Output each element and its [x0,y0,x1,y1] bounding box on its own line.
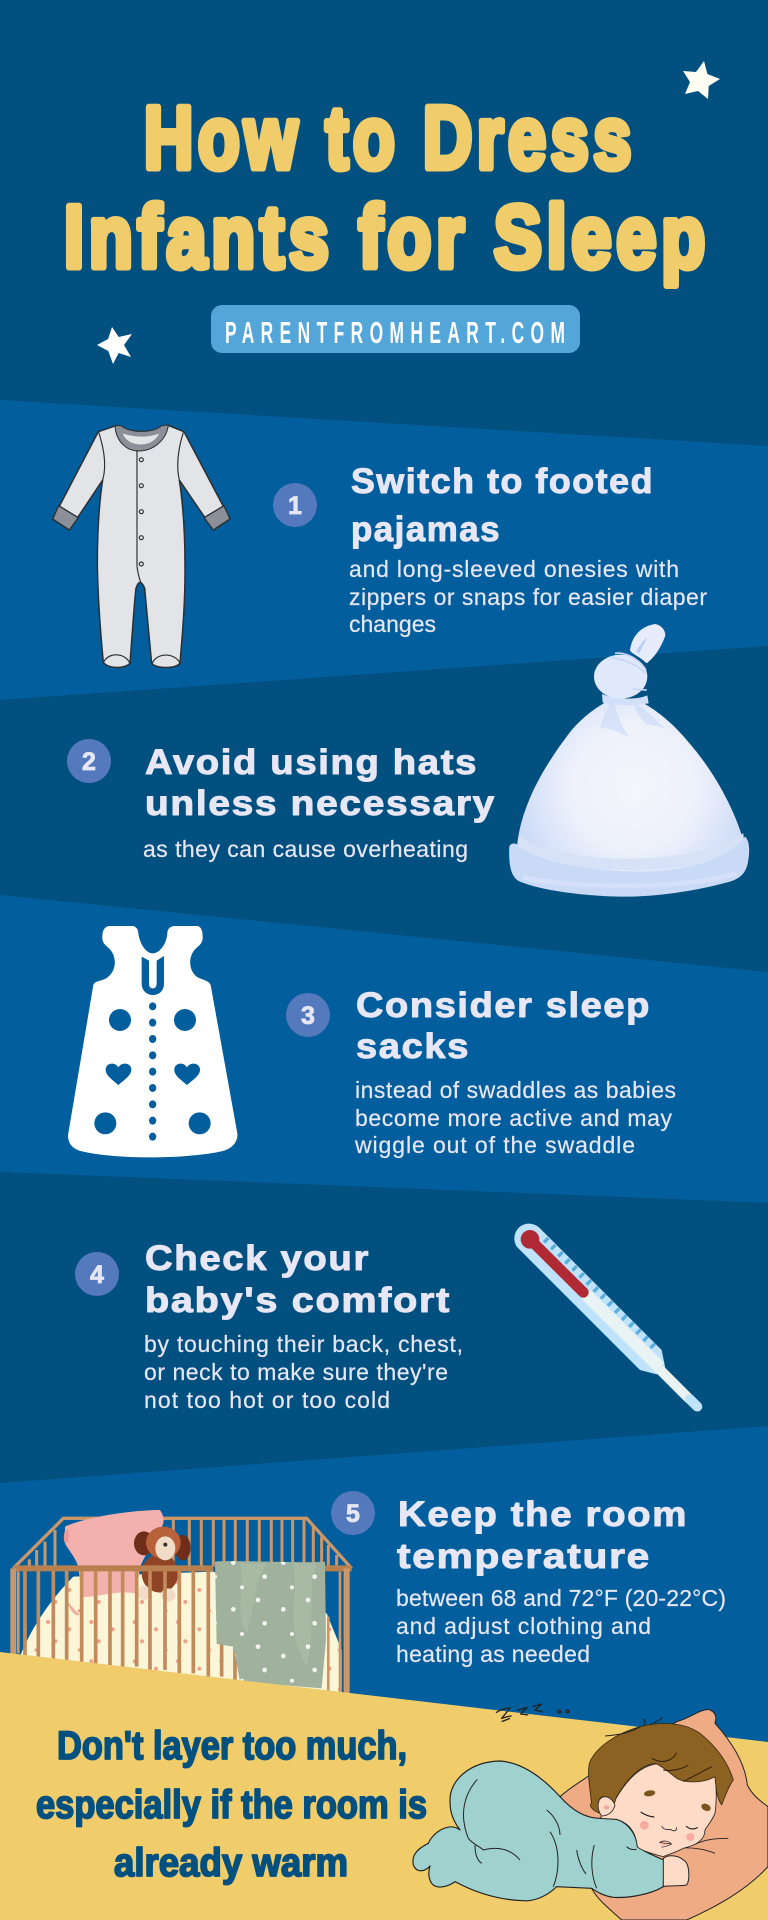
icon: thermometer [514,1224,697,1407]
icon: sleeping baby [413,1704,768,1920]
heading: consider sleep sacks [356,986,651,1066]
heading: switch to footed pajamas: pajamas [351,510,501,549]
heading: keep the room temperature: Keep the room [398,1495,688,1534]
icon: star top right [683,61,720,99]
number badge 3 [286,993,330,1037]
icon: star left [97,327,132,364]
heading: consider sleep sacks: sacks [356,1027,470,1066]
title [64,88,710,286]
heading: avoid using hats: Avoid using hats [145,743,478,782]
icon: sleep sack [68,926,237,1157]
heading: check your baby's comfort: baby's comfort [145,1281,451,1320]
text: comfort detail: by touching their back, chest, [144,1331,463,1357]
text: sleep sacks detail: become more active and may [355,1105,672,1131]
number badge 3: 3 [301,1002,315,1030]
number badge 2: 2 [82,748,96,776]
heading: keep the room temperature: temperature [397,1537,651,1576]
text: comfort detail: or neck to make sure they're [144,1359,448,1385]
website badge: PARENTFROMHEART.COM [225,316,565,350]
number badge 4: 4 [90,1261,104,1289]
text: layering tip: already warm [114,1841,348,1885]
text: sleep sacks detail: wiggle out of the swaddle [354,1132,635,1158]
text: temperature detail [396,1585,726,1667]
icon: knotted hat [509,624,749,897]
panel: footer tip [0,1652,768,1920]
text: comfort detail [144,1331,463,1413]
heading: avoid using hats [145,743,496,823]
heading: avoid using hats: unless necessary [145,784,496,823]
heading: switch to footed pajamas: Switch to footed [351,462,654,501]
header [64,61,720,364]
text: temperature detail: between 68 and 72°F (20-22°C) [396,1585,726,1611]
icon: footed pajamas [53,425,230,668]
heading: check your baby's comfort: Check your [145,1239,370,1278]
panel: step 2 hats [0,624,768,972]
text: temperature detail: heating as needed [396,1641,590,1667]
panel: step 4 check comfort [0,1172,768,1483]
text: hats detail: as they can cause overheating [143,836,468,862]
text: layering tip: especially if the room is [36,1783,427,1827]
panel: step 1 footed pajamas [0,400,768,700]
text: layering tip [36,1724,427,1885]
icon: sleep z marks [496,1704,569,1722]
title: How to Dress [144,88,636,187]
panel: step 3 sleep sacks [0,895,768,1203]
website badge [211,305,580,353]
heading: switch to footed pajamas [351,462,654,549]
heading: keep the room temperature [397,1495,688,1576]
number badge 1 [273,483,317,527]
text: pajamas detail: and long-sleeved onesies with [349,556,679,582]
text: comfort detail: not too hot or too cold [144,1387,390,1413]
text: pajamas detail: changes [349,611,436,637]
text: pajamas detail [349,556,707,637]
text: pajamas detail: zippers or snaps for easier diaper [349,584,707,610]
text: temperature detail: and adjust clothing and [396,1613,651,1639]
text: layering tip: Don't layer too much, [57,1724,407,1768]
heading: consider sleep sacks: Consider sleep [356,986,651,1025]
text: sleep sacks detail: instead of swaddles as babies [355,1077,676,1103]
heading: check your baby's comfort [145,1239,451,1320]
panel: step 5 room temperature [0,1426,768,1742]
text: sleep sacks detail [354,1077,676,1158]
number badge 5 [331,1491,375,1535]
icon: crib with blankets and puppy [13,1510,352,1707]
number badge 4 [75,1252,119,1296]
number badge 1: 1 [288,492,302,520]
number badge 2 [67,739,111,783]
number badge 5: 5 [346,1500,360,1528]
